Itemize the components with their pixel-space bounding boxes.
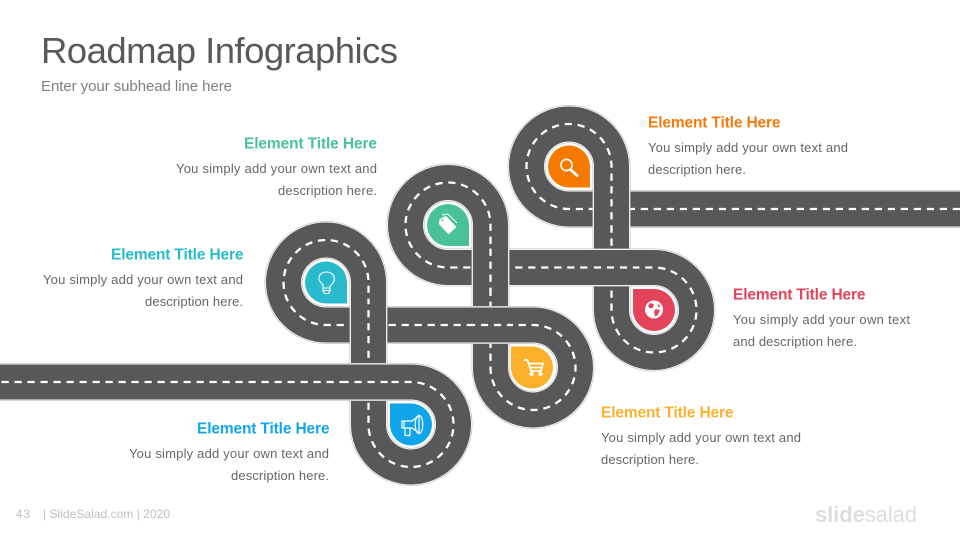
horizontal strands passing over bbox=[346, 248, 634, 401]
text block: green element: Element Title Here bbox=[244, 136, 377, 152]
pin: search (orange) bbox=[548, 146, 590, 188]
text block: yellow element: description here. bbox=[601, 452, 699, 467]
text block: cyan element: You simply add your own text and bbox=[43, 272, 243, 287]
logo: slidesalad bbox=[815, 502, 917, 527]
icon: megaphone bbox=[402, 416, 423, 436]
text block: blue element: description here. bbox=[231, 468, 329, 483]
pin: megaphone (blue) bbox=[390, 404, 432, 446]
text block: green element: description here. bbox=[278, 183, 377, 198]
text block: cyan element: Element Title Here bbox=[111, 246, 244, 264]
pin: tag (green) bbox=[427, 204, 469, 246]
text block: red element: and description here. bbox=[733, 334, 857, 349]
text block: cyan element: description here. bbox=[145, 294, 243, 309]
subhead: Enter your subhead line here bbox=[41, 78, 232, 95]
text block: yellow element bbox=[601, 404, 801, 467]
text block: blue element bbox=[129, 420, 330, 483]
text block: red element bbox=[733, 286, 910, 349]
text block: orange element: Element Title Here bbox=[648, 114, 781, 132]
text block: orange element bbox=[648, 114, 848, 177]
text block: orange element: You simply add your own text and bbox=[648, 140, 848, 155]
vertical strands passing over bbox=[350, 186, 630, 348]
text block: cyan element bbox=[43, 246, 244, 309]
icon: globe bbox=[645, 300, 663, 318]
text block: blue element: Element Title Here bbox=[197, 420, 330, 438]
text block: green element: You simply add your own text and bbox=[176, 161, 377, 176]
text block: red element: You simply add your own text bbox=[733, 312, 910, 327]
text block: orange element: description here. bbox=[648, 162, 746, 177]
roadmap road bbox=[0, 124, 960, 467]
text block: blue element: You simply add your own text and bbox=[129, 446, 329, 461]
icon: tag bbox=[439, 214, 457, 234]
pin: cart (yellow) bbox=[511, 346, 553, 388]
title: Roadmap Infographics bbox=[41, 30, 398, 71]
text block: yellow element: Element Title Here bbox=[601, 404, 734, 422]
footer: | SlideSalad.com | 2020 bbox=[43, 507, 170, 521]
pin: bulb (cyan) bbox=[305, 262, 347, 304]
text block: yellow element: You simply add your own text and bbox=[601, 430, 801, 445]
text block: green element bbox=[176, 136, 377, 198]
icon: magnifier bbox=[561, 159, 577, 176]
icon: shopping cart bbox=[524, 360, 543, 375]
icon: lightbulb bbox=[319, 272, 334, 294]
pin: globe (red) bbox=[633, 289, 675, 331]
text block: red element: Element Title Here bbox=[733, 286, 866, 304]
footer: 43 bbox=[16, 507, 30, 521]
